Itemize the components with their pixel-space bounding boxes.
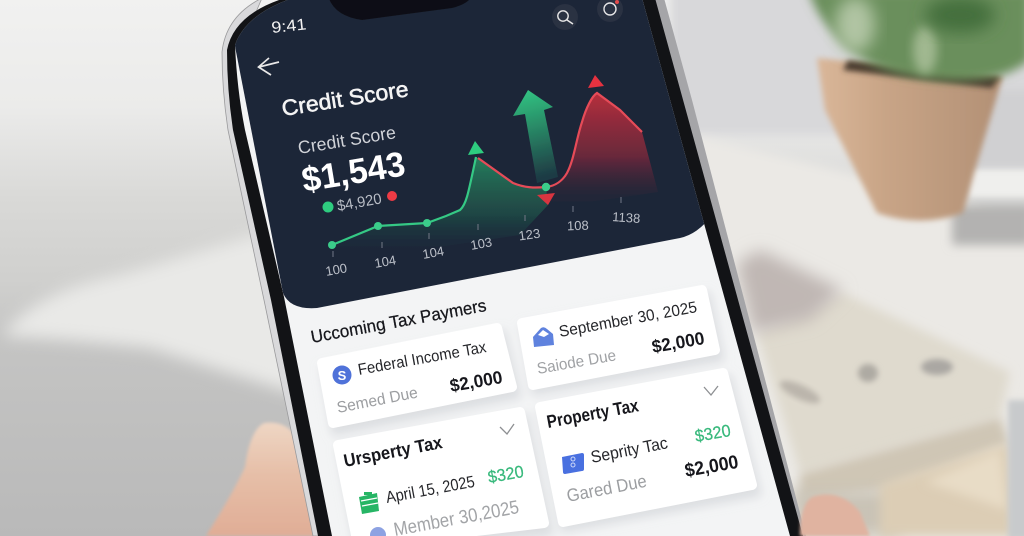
- table right: [690, 135, 1024, 536]
- score value: $1,543: [299, 144, 408, 200]
- camera notch: [328, 0, 472, 20]
- status time: 9:41: [271, 16, 307, 37]
- icon: dollar coin: S: [338, 368, 347, 383]
- line chart: 1138: [612, 209, 641, 226]
- dark credit score panel: [225, 0, 712, 308]
- card: Federal Income Tax: [322, 328, 512, 423]
- line chart: 104: [373, 252, 397, 271]
- legend red dot: [387, 191, 397, 201]
- phone side buttons: [227, 113, 704, 302]
- small red arrowhead down: [537, 193, 555, 205]
- icon: blue briefcase: [562, 453, 584, 474]
- heading: Credit Score: Credit Score: [280, 76, 410, 121]
- green area: [352, 158, 548, 240]
- line chart: 104: [421, 243, 445, 262]
- card title: Federal Income Tax: [357, 339, 488, 379]
- shelf band: [968, 170, 1024, 197]
- icon: back arrow: [258, 58, 279, 75]
- card status: Semed Due: [336, 385, 419, 417]
- legend value: $4,920: [336, 190, 383, 215]
- card status: Saiode Due: [536, 347, 618, 378]
- axis ticks and labels: [333, 197, 621, 257]
- icon: dollar coin: [332, 366, 352, 384]
- phone right edge: [640, 0, 806, 536]
- line chart: 108: [567, 218, 589, 233]
- green line: [332, 157, 476, 245]
- card date: September 30, 2025: [558, 299, 699, 341]
- card shadows: [320, 291, 762, 536]
- section title: Uccoming Tax Paymers: [309, 295, 488, 347]
- line chart: 103: [469, 234, 493, 253]
- red line: [478, 93, 642, 188]
- label: Credit Score: Credit Score: [296, 122, 397, 158]
- line chart: [324, 75, 658, 279]
- icon: search: [552, 4, 578, 30]
- icon: blue coin: [370, 527, 386, 536]
- card amount: $2,000: [650, 328, 706, 357]
- big green arrow: [513, 90, 558, 183]
- hand: right finger: [800, 495, 870, 536]
- card label: Seprity Tac: [589, 433, 670, 467]
- icon: blue envelope: [533, 327, 554, 347]
- card status: Gared Due: [565, 471, 648, 506]
- card amount: $320: [693, 421, 732, 446]
- small green arrowhead: [468, 141, 484, 155]
- card amount: $320: [486, 462, 525, 487]
- plant pot: [817, 58, 1003, 220]
- card date: April 15, 2025: [384, 473, 476, 507]
- books: [757, 293, 1010, 473]
- phone silver frame: [222, 0, 330, 536]
- card: Ursperty Tax: [338, 412, 544, 536]
- red area: [546, 94, 658, 194]
- icon: green clipboard: [359, 492, 379, 514]
- plant foliage: [808, 0, 1024, 81]
- screen: [235, 0, 790, 536]
- table highlight left: [5, 225, 300, 395]
- card title: Ursperty Tax: [342, 432, 444, 471]
- line chart: 100: [324, 260, 348, 279]
- icon: chevron: [500, 424, 514, 434]
- phone black bezel: [227, 0, 803, 536]
- background wall right: [670, 0, 1024, 135]
- card amount: $2,000: [683, 452, 740, 482]
- legend green dot: [322, 202, 334, 212]
- card: September 30, 2025: [522, 290, 715, 385]
- hand: left thumb: [206, 423, 330, 536]
- small red arrowhead up: [588, 75, 604, 88]
- icon: notification: [597, 0, 623, 22]
- card title: Property Tax: [545, 395, 640, 432]
- markers: [328, 183, 550, 249]
- line chart: 123: [518, 226, 541, 243]
- icon: chevron: [704, 386, 718, 395]
- card amount: $2,000: [448, 367, 504, 396]
- phone: [222, 0, 806, 536]
- card: Property Tax: [540, 373, 752, 522]
